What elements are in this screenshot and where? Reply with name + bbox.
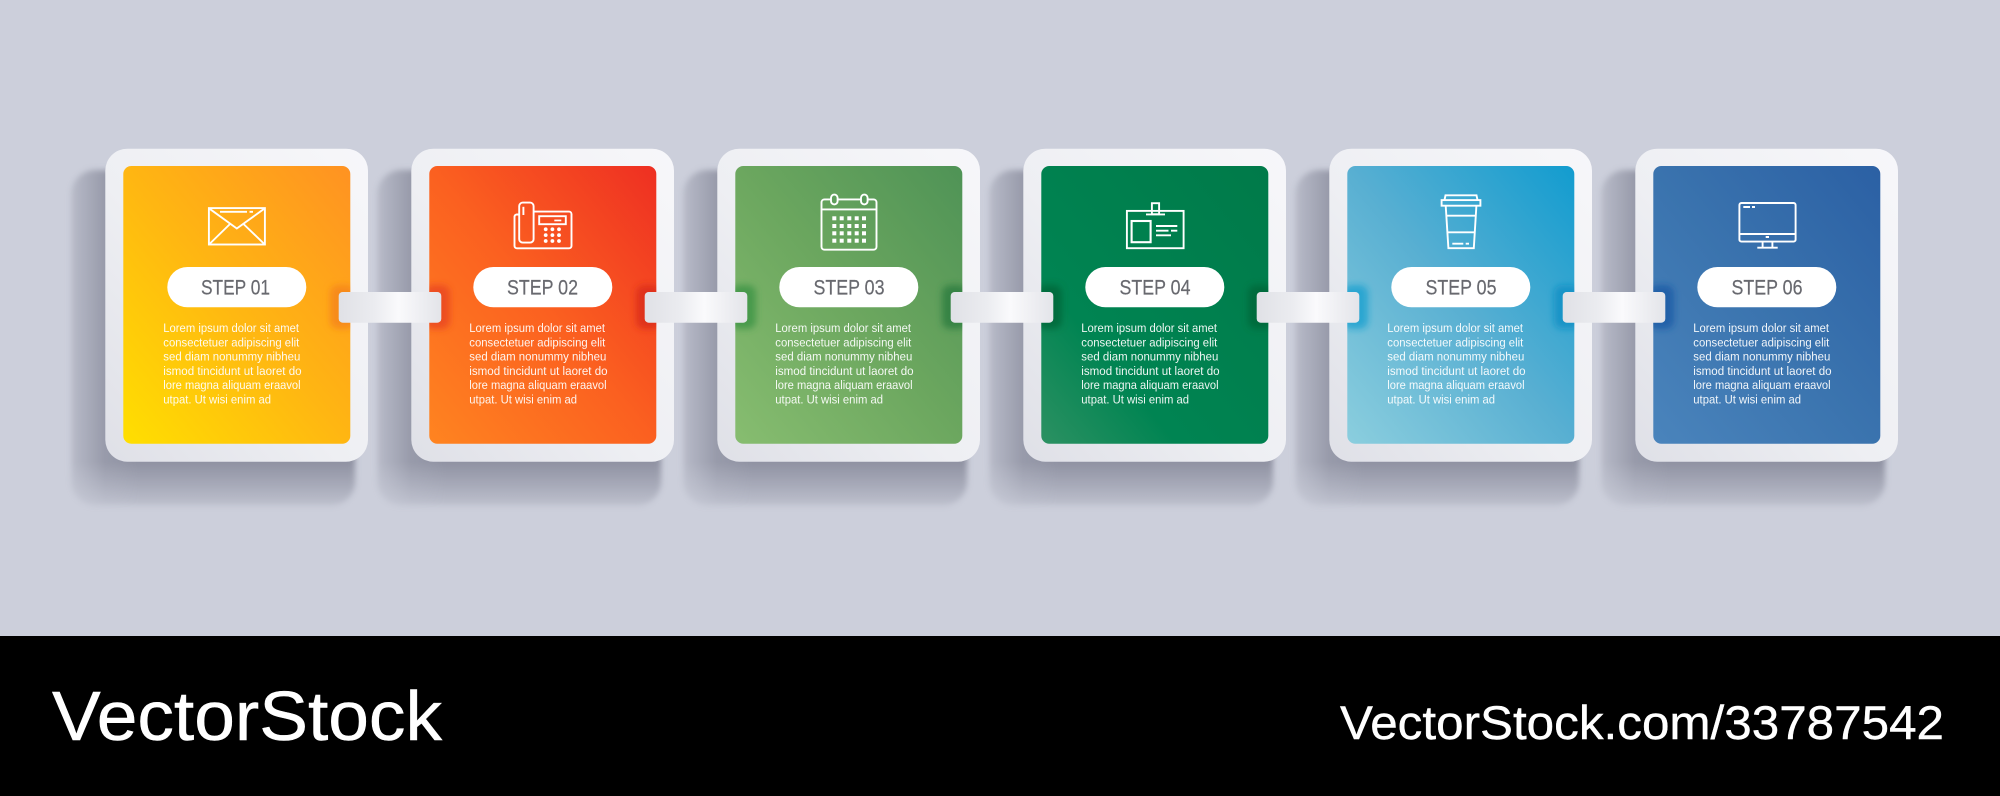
body text: ismod tincidunt ut laoret do [775,364,914,378]
card frame [1023,149,1286,462]
step pill: STEP 02 [507,277,578,300]
panel: step 02 [411,149,674,462]
body text: Lorem ipsum dolor sit amet [163,321,300,335]
body text: lore magna aliquam eraavol [1387,378,1525,392]
body text: consectetuer adipiscing elit [1693,335,1830,349]
connector glows [1037,285,1273,329]
body text: sed diam nonummy nibheu [1387,350,1524,364]
footer logo text: VectorStock [52,677,443,755]
body text: consectetuer adipiscing elit [469,335,606,349]
step pill [1697,267,1836,307]
step pill: STEP 01 [201,277,270,300]
body text: ismod tincidunt ut laoret do [163,364,302,378]
step pill: STEP 05 [1426,277,1496,300]
body text [163,321,302,406]
body text: consectetuer adipiscing elit [163,335,300,349]
card frame [717,149,980,462]
body text [775,321,914,406]
body text: ismod tincidunt ut laoret do [1693,364,1832,378]
card frame [105,149,368,462]
card fill [123,166,350,444]
body text [1081,321,1220,406]
body text: consectetuer adipiscing elit [775,335,912,349]
footer bar [0,636,2000,796]
connector glows [1343,285,1579,329]
footer url text: VectorStock.com/33787542 [1340,696,1944,749]
connector glow [330,285,355,329]
step pill: STEP 06 [1732,277,1802,300]
step pill: STEP 04 [1120,277,1191,300]
body text: Lorem ipsum dolor sit amet [775,321,912,335]
body text: sed diam nonummy nibheu [775,350,912,364]
body text: utpat. Ut wisi enim ad [469,392,577,406]
icon: envelope [209,208,265,244]
calendar grid [832,216,866,243]
body text: utpat. Ut wisi enim ad [163,392,271,406]
panel: step 03 [717,149,980,462]
card fill [429,166,656,444]
body text [1693,321,1832,406]
body text: lore magna aliquam eraavol [163,378,301,392]
icon: calendar [822,195,876,250]
card fill [1347,166,1574,444]
body text: ismod tincidunt ut laoret do [1387,364,1526,378]
panel: step 04 [1023,149,1286,462]
step pill [473,267,612,307]
background [0,0,2000,636]
step pill [1085,267,1224,307]
card frame [411,149,674,462]
body text: Lorem ipsum dolor sit amet [469,321,606,335]
icon: desktop monitor [1739,203,1796,248]
step pill [779,267,918,307]
body text: consectetuer adipiscing elit [1081,335,1218,349]
card fill [1041,166,1268,444]
body text: lore magna aliquam eraavol [1081,378,1219,392]
panel: step 01 [105,149,368,462]
card fill [1653,166,1880,444]
connector glows [425,285,661,329]
connector glows [731,285,967,329]
body text: Lorem ipsum dolor sit amet [1387,321,1524,335]
body text: utpat. Ut wisi enim ad [775,392,883,406]
body text: utpat. Ut wisi enim ad [1693,392,1801,406]
connectors between cards [339,292,1665,323]
step pill [167,267,306,307]
body text: sed diam nonummy nibheu [1693,350,1830,364]
body text: lore magna aliquam eraavol [775,378,913,392]
body text: sed diam nonummy nibheu [163,350,300,364]
keypad [544,220,561,243]
body text: lore magna aliquam eraavol [469,378,607,392]
body text: sed diam nonummy nibheu [1081,350,1218,364]
body text: sed diam nonummy nibheu [469,350,606,364]
body text: Lorem ipsum dolor sit amet [1693,321,1830,335]
panel: step 06 [1635,149,1898,462]
body text: consectetuer adipiscing elit [1387,335,1524,349]
icon: coffee cup [1442,195,1480,248]
step pill [1391,267,1530,307]
step pill: STEP 03 [814,277,884,300]
card fill [735,166,962,444]
connector glow [1649,285,1674,329]
body text: ismod tincidunt ut laoret do [469,364,608,378]
body text: ismod tincidunt ut laoret do [1081,364,1220,378]
drop shadows [71,170,1885,506]
body text: utpat. Ut wisi enim ad [1081,392,1189,406]
card frame [1329,149,1592,462]
body text [469,321,608,406]
icon: desk phone [514,203,572,248]
body text: utpat. Ut wisi enim ad [1387,392,1495,406]
panel: step 05 [1329,149,1592,462]
icon: id badge [1127,203,1184,248]
body text [1387,321,1526,406]
body text: Lorem ipsum dolor sit amet [1081,321,1218,335]
card frame [1635,149,1898,462]
body text: lore magna aliquam eraavol [1693,378,1831,392]
